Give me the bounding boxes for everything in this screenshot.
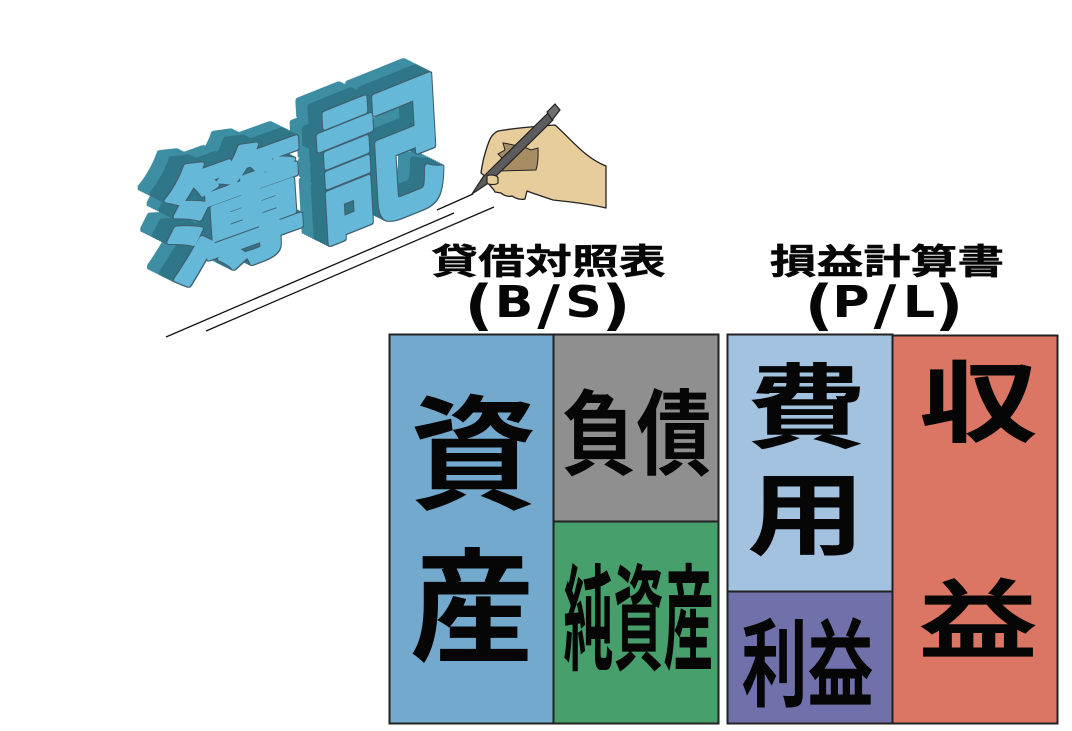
- panel: net assets: [554, 522, 718, 724]
- panel: profit: 利益: [742, 613, 873, 720]
- underline strokes: [166, 194, 494, 337]
- panel: expenses: [728, 334, 892, 592]
- panel: revenue: [892, 336, 1058, 724]
- heading: balance sheet: /: [537, 274, 561, 337]
- panel: assets: 資: [410, 386, 537, 526]
- panel: expenses: 費: [747, 357, 866, 460]
- heading: income statement: 損益計算書: [770, 243, 1004, 282]
- heading: balance sheet: B: [495, 277, 533, 328]
- logo: 3D 簿記: [158, 20, 448, 318]
- heading: balance sheet: 貸借対照表: [431, 243, 666, 282]
- panel: net assets: 純資産: [564, 557, 713, 685]
- heading: balance sheet: S: [565, 277, 602, 328]
- heading: income statement: /: [874, 274, 897, 337]
- panel: expenses: 用: [747, 466, 865, 567]
- heading: income statement: P: [832, 277, 869, 328]
- heading: income statement: ): [935, 274, 963, 337]
- panel: liabilities: 負債: [562, 384, 711, 487]
- panel: assets: [390, 334, 554, 724]
- heading: balance sheet: ): [602, 274, 630, 337]
- panel: assets: 産: [410, 542, 534, 679]
- logo: 3D 簿記: 記: [311, 20, 448, 279]
- panel: profit: [728, 592, 892, 724]
- heading: income statement: L: [903, 277, 935, 328]
- heading: income statement: (: [805, 274, 833, 337]
- heading: balance sheet: [431, 243, 666, 337]
- panel: liabilities: [554, 334, 718, 522]
- panel: income statement: [728, 334, 1058, 724]
- logo: 3D 簿記: 簿: [158, 86, 310, 318]
- heading: balance sheet: (: [465, 274, 493, 337]
- panel: balance sheet: [390, 334, 718, 724]
- heading: income statement: [770, 243, 1004, 337]
- icon: writing hand with pen: [472, 104, 606, 208]
- panel: revenue: 収: [919, 355, 1038, 454]
- panel: revenue: 益: [918, 574, 1038, 671]
